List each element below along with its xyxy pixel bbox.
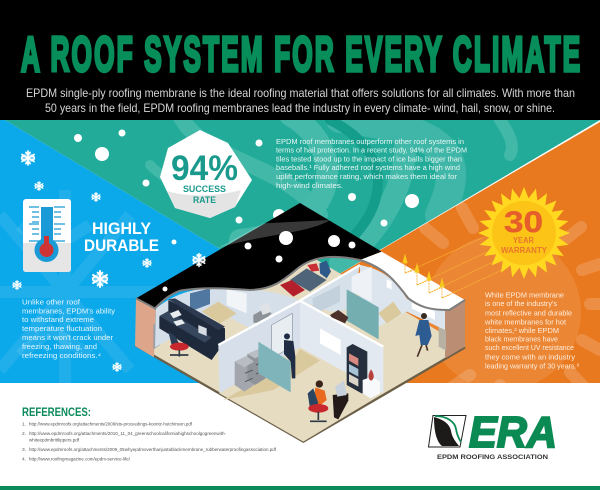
- logo: ERA: EPDM ROOFING ASSOCIATION: [437, 454, 549, 461]
- badge: 30 year warranty sun: YEAR: [513, 236, 534, 245]
- text block: durability: temperature fluctuation: [22, 324, 102, 333]
- references list: 4.: [22, 456, 26, 462]
- text block: durability: refreezing conditions.⁴: [22, 351, 101, 360]
- text block: UV resistance: black membranes have: [485, 334, 558, 344]
- man in suit: [284, 333, 295, 378]
- badge: 94% success rate: 94%: [171, 149, 238, 188]
- heading: highly durable: HIGHLY: [92, 219, 152, 238]
- text block: durability: Unlike other roof: [22, 298, 80, 306]
- footer band: [0, 486, 600, 490]
- copier: [253, 303, 272, 323]
- pedestal with vase: [363, 369, 380, 398]
- references list: http://www.epdmroofs.org/attachments/2009/sts-proceedings-koontz-hutchinson.pdf: [29, 422, 193, 428]
- logo: ERA: [428, 408, 557, 461]
- references list: 3.: [22, 447, 26, 453]
- text block: hail protection: uplift performance rating, which makes them ideal for: [276, 172, 458, 181]
- heat reflection arrows: [402, 238, 502, 298]
- text block: UV resistance: [484, 290, 580, 370]
- text block: hail protection: terms of hail protection. In a recent study, 94% of the EPDM: [276, 146, 467, 154]
- text block: hail protection: tiles tested stood up to the impact of ice balls bigger than: [276, 154, 462, 164]
- front room floor: [219, 347, 383, 442]
- text block: hail protection: [276, 137, 467, 190]
- header band: [0, 0, 600, 120]
- panel: teal hail background: [5, 120, 600, 274]
- text block: UV resistance: climates,² while EPDM: [485, 326, 559, 335]
- references list: http://www.epdmroofs.org/attachments/2010_11_04_greenschoolcaliforniahighschoolgogreenwith-: [29, 431, 226, 437]
- interior wall left: [218, 301, 300, 393]
- white board: [320, 328, 341, 355]
- bench: [330, 310, 348, 323]
- teal partition right: [347, 289, 379, 339]
- panel: blue cold climate background: [0, 120, 220, 383]
- badge: 30 year warranty sun: 30: [504, 206, 543, 239]
- references list: 2.: [22, 431, 26, 437]
- reception desk: [159, 298, 225, 360]
- intro text: 50 years in the field, EPDM roofing membranes lead the industry in every climate- wind, hail, snow, or shine.: [45, 101, 555, 115]
- roof: white: [360, 252, 465, 310]
- text block: UV resistance: is one of the industry's: [485, 299, 557, 308]
- heading: highly durable: DURABLE: [84, 236, 159, 255]
- roof edge: [136, 257, 465, 310]
- text block: UV resistance: leading warranty of 30 years.³: [485, 362, 580, 370]
- panel: orange hot climate background: [340, 122, 600, 383]
- text block: UV resistance: White EPDM membrane: [485, 290, 564, 300]
- logo: ERA: ERA: [469, 408, 557, 457]
- icon: roof membrane mark: [428, 416, 466, 447]
- back walls: [155, 265, 445, 347]
- references list: 1.: [22, 422, 26, 428]
- text block: UV resistance: white membranes for hot: [484, 318, 566, 326]
- text block: durability: [22, 298, 115, 360]
- illustration: isometric office building: [135, 203, 502, 442]
- roof: black: [136, 203, 382, 308]
- snowflakes: [13, 151, 205, 372]
- big hail snow balls: [74, 130, 419, 244]
- badge: 30 year warranty sun: [478, 187, 570, 279]
- text block: hail protection: baseballs.¹ Fully adhered roof systems have a high wind: [276, 163, 460, 172]
- intro text: [26, 86, 575, 115]
- text block: UV resistance: they come with an industry: [485, 352, 575, 362]
- title: A ROOF SYSTEM FOR EVERY CLIMATE: [21, 27, 580, 82]
- badge: 30 year warranty sun: WARRANTY: [501, 246, 548, 255]
- text block: durability: freezing, thawing, and: [22, 342, 97, 351]
- text block: UV resistance: most reflective and durable: [485, 308, 572, 318]
- badge: 94% success rate: RATE: [193, 195, 216, 206]
- text block: durability: to withstand extreme: [22, 315, 94, 324]
- door: [272, 313, 292, 358]
- text block: durability: means it won't crack under: [22, 333, 114, 342]
- heading: highly durable: [84, 219, 159, 255]
- badge: 94% success rate: [160, 130, 252, 218]
- hail on roof: [162, 231, 356, 292]
- text block: hail protection: high-wind climates.: [276, 181, 343, 190]
- filing cabinets: [235, 349, 266, 392]
- icon: thermometer: [23, 199, 71, 272]
- text block: hail protection: EPDM roof membranes outperform other roof systems in: [276, 137, 464, 146]
- interior wall right: [300, 301, 383, 393]
- references list: whiteepdmbrittlippers.pdf: [29, 438, 80, 444]
- side walls: [135, 298, 465, 358]
- references heading: REFERENCES:: [22, 407, 91, 419]
- red chair: [168, 332, 189, 357]
- back room desk: [280, 261, 331, 297]
- references list: http://www.roofingmagazine.com/epdm-service-life/: [29, 456, 131, 462]
- bookshelf: [347, 344, 367, 393]
- badge: 94% success rate: SUCCESS: [183, 184, 226, 195]
- woman in blue suit: [415, 313, 432, 357]
- floor: [135, 250, 465, 442]
- references list: [22, 422, 277, 462]
- front desk worker: [308, 380, 348, 421]
- text block: durability: membranes, EPDM's ability: [22, 306, 115, 316]
- teal partition front: [258, 342, 291, 392]
- references list: http://www.epdmroofs.org/attachments/2009_05whyepdmoverthanjustablackmembrane_rubberwaterproofingassociation.pdf: [29, 447, 277, 453]
- text block: UV resistance: such excellent UV resistance: [485, 343, 574, 352]
